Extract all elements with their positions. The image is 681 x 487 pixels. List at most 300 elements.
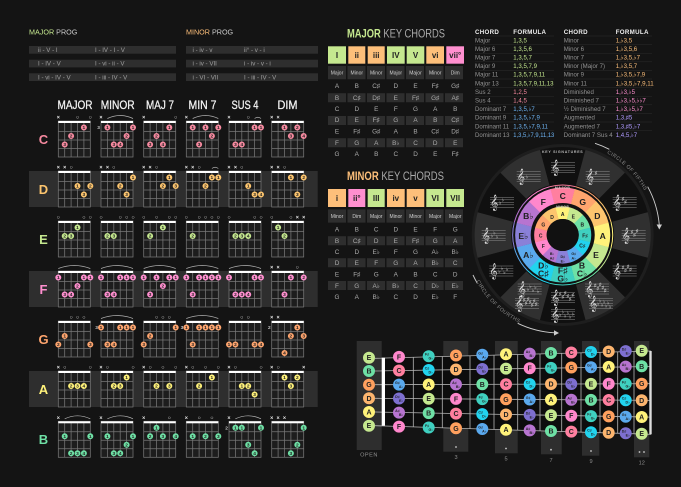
heading: minor prog: MINOR PROG bbox=[186, 28, 234, 36]
C sus 4: 1134 bbox=[234, 125, 263, 148]
A dim: 123 bbox=[283, 375, 299, 390]
chord formula table: major family: CHORD bbox=[475, 29, 499, 36]
accidental note labels: E♭ bbox=[482, 370, 487, 374]
minor progressions panel: i - iv - v bbox=[192, 47, 213, 54]
chord formula table: minor family: FORMULA bbox=[616, 29, 649, 36]
accidental note labels: D♭ bbox=[591, 433, 595, 437]
minor progressions panel bbox=[186, 28, 318, 81]
major key chords table: G bbox=[354, 140, 359, 147]
E min 7: 2 bbox=[191, 234, 194, 240]
accidental note labels: F♯ bbox=[587, 413, 591, 417]
C minor: 11234 bbox=[106, 125, 135, 148]
accidental note labels: C♯ bbox=[478, 411, 483, 415]
G maj 7: 123 bbox=[142, 325, 177, 348]
minor key chords table: A bbox=[355, 294, 360, 301]
accidental note labels: C♯ bbox=[526, 381, 530, 385]
F sus 4 bbox=[228, 266, 263, 307]
B minor: 11234 bbox=[106, 434, 135, 457]
A maj 7 bbox=[142, 365, 177, 407]
key signature staves: 𝄞 bbox=[589, 296, 597, 312]
minor key chords table: E♭ bbox=[452, 283, 459, 290]
E min 7 bbox=[185, 215, 220, 257]
minor key chords table: Minor bbox=[390, 214, 402, 220]
D minor bbox=[99, 165, 135, 207]
numeral cells: vii° bbox=[449, 51, 461, 60]
nut bbox=[382, 358, 385, 426]
row band: A bbox=[29, 371, 318, 407]
numeral cells: vi bbox=[432, 51, 439, 60]
A sus 4: 123 bbox=[240, 384, 256, 398]
C min 7: × bbox=[185, 115, 188, 121]
minor key chords table: C♯ bbox=[353, 238, 361, 245]
major key chords table: G♯ bbox=[451, 83, 459, 90]
major key chords table: D bbox=[335, 117, 340, 124]
B min 7: 123 bbox=[191, 434, 220, 440]
numeral cells: ii° bbox=[353, 194, 361, 203]
major key chords table: G bbox=[335, 151, 340, 158]
D sus 4 bbox=[227, 165, 263, 207]
B dim: 123 bbox=[290, 425, 305, 457]
C maj 7 bbox=[142, 115, 177, 157]
E maj 7: ○○○○ bbox=[142, 215, 177, 221]
chord formula table: minor family: Minor (Major 7) bbox=[564, 63, 605, 70]
minor key labels: D bbox=[550, 215, 554, 221]
D sus 4: 134 bbox=[247, 184, 263, 198]
accidental note labels: A♯ bbox=[622, 363, 626, 367]
major key chords table: E bbox=[453, 140, 457, 147]
E major bbox=[57, 215, 92, 257]
key signature staves: 𝄞 bbox=[551, 160, 559, 176]
accidental note labels: A♯ bbox=[452, 381, 457, 385]
B maj 7: ×○ bbox=[142, 415, 171, 421]
row: A chords: A bbox=[39, 382, 49, 397]
minor key chords table: B♭ bbox=[432, 260, 439, 267]
accidental note labels: G♯ bbox=[526, 396, 530, 400]
minor key chords table: A bbox=[413, 260, 418, 267]
accidental note labels: F♯ bbox=[425, 424, 429, 428]
B dim: ××× bbox=[270, 415, 286, 421]
chord formula table: major family: 1,3,5,♭7,9,11,13 bbox=[513, 132, 555, 139]
minor progressions panel: i - VI - VII bbox=[192, 74, 219, 81]
D min 7: 112 bbox=[204, 175, 220, 190]
chord formula table: major family: 1,3,5,♭7,9 bbox=[513, 115, 541, 122]
accidental note labels: E♭ bbox=[530, 415, 534, 419]
major key chords table bbox=[328, 28, 464, 158]
row: B chords: B bbox=[39, 432, 48, 447]
major key chords table: F♯ bbox=[452, 151, 459, 158]
minor key chords table: Major bbox=[429, 214, 442, 220]
arrow: circle of fifths bbox=[595, 143, 662, 230]
C min 7: 11123 bbox=[191, 125, 220, 148]
key signature staves: 𝄞 bbox=[622, 228, 630, 244]
arrow: circle of fourths bbox=[473, 275, 559, 336]
chord formula table: major family: Dominant 9 bbox=[475, 115, 507, 122]
major progressions panel: ii - V - I bbox=[38, 47, 58, 54]
major key chords table: D bbox=[393, 83, 398, 90]
major progressions panel: I - IV - V bbox=[38, 61, 62, 68]
major key labels: E♭ bbox=[518, 231, 528, 241]
accidental note labels: C♯ bbox=[587, 348, 592, 352]
major key labels: C bbox=[560, 191, 566, 201]
accidental note labels: E♭ bbox=[626, 352, 630, 356]
chord type headers bbox=[58, 100, 298, 112]
fretboard bbox=[357, 341, 652, 466]
G dim: 1234 bbox=[283, 325, 305, 357]
numeral cells: VII bbox=[450, 194, 460, 203]
fret labels: 5 bbox=[504, 456, 508, 462]
accidental note labels: B♭ bbox=[626, 367, 630, 371]
D dim bbox=[270, 165, 305, 207]
major key chords table: Minor bbox=[370, 70, 383, 76]
chord formula table: major family: 1,3,5 bbox=[513, 37, 527, 44]
minor key labels: D♯ bbox=[560, 255, 565, 259]
accidental note labels: G♯ bbox=[478, 351, 483, 355]
C major: ×○○ bbox=[57, 115, 92, 121]
key signature staves: ♭♭♭♭♭ bbox=[527, 284, 539, 295]
ring labels: MAJOR bbox=[555, 186, 571, 190]
minor key chords table: F bbox=[374, 260, 378, 267]
notes: D sharp / E flat bbox=[399, 351, 626, 433]
chord formula table: minor family: 1,3,♯5 bbox=[616, 115, 633, 122]
G sus 4: ○○ bbox=[240, 315, 250, 321]
accidental note labels: A♭ bbox=[626, 417, 630, 421]
A sus 4 bbox=[227, 365, 263, 407]
chord formula table: major family: FORMULA bbox=[513, 29, 547, 36]
minor key chords table: G bbox=[335, 294, 340, 301]
chord type headers: MINOR bbox=[101, 100, 135, 112]
accidental note labels: G♭ bbox=[428, 428, 433, 432]
numeral cells bbox=[328, 189, 464, 207]
minor key chords table: G bbox=[374, 272, 379, 278]
G min 7 bbox=[181, 316, 220, 357]
row: F chords: F bbox=[40, 282, 48, 297]
major key labels: B♭ bbox=[523, 211, 533, 221]
key signature staves: ♭♭♭♭♭♭ bbox=[559, 309, 574, 320]
E dim bbox=[270, 215, 305, 257]
A major: ×○○ bbox=[57, 365, 92, 371]
minor key chords table: C bbox=[453, 260, 458, 267]
notes: B: BBBBBBB bbox=[366, 350, 644, 436]
accidental note labels: G♭ bbox=[591, 417, 596, 421]
chord formula table: major family: 1,3,5,♭7,9,11 bbox=[513, 123, 549, 130]
chord formula table: major family: Major 6 bbox=[475, 46, 496, 53]
C dim: 1234 bbox=[283, 125, 305, 140]
D dim: ××○ bbox=[270, 165, 286, 171]
F major: 111234 bbox=[57, 275, 92, 298]
minor key labels: E bbox=[572, 214, 576, 220]
numeral cells: IV bbox=[392, 51, 400, 60]
major key chords table: D bbox=[433, 140, 438, 147]
minor key labels: F♯ bbox=[582, 234, 588, 240]
minor key chords table: F bbox=[394, 249, 398, 256]
C minor: 3 bbox=[97, 125, 100, 131]
key signature staves: 𝄞 bbox=[482, 228, 490, 244]
heading: minor key chords: MINOR KEY CHORDS bbox=[347, 171, 444, 183]
chord type headers: MAJ 7 bbox=[146, 100, 174, 112]
D dim: 123 bbox=[290, 175, 305, 198]
fret markers bbox=[455, 446, 645, 453]
row: G chords: G bbox=[38, 332, 49, 347]
chord formula table: major family: Dominant 7 bbox=[475, 106, 507, 113]
accidental note labels: E♭ bbox=[571, 384, 576, 388]
G min 7: 111113 bbox=[185, 325, 220, 348]
chord formula table: minor family: 1,3,♯5,♭7 bbox=[616, 123, 641, 130]
minor key chords table: A bbox=[453, 238, 458, 245]
B major bbox=[57, 415, 92, 457]
accidental note labels: C♯ bbox=[425, 366, 429, 370]
major key chords table: A♯ bbox=[451, 95, 459, 102]
chord formula table: major family: 1,2,5 bbox=[513, 89, 527, 96]
key signature staves: ♭♭♭♭ bbox=[498, 266, 508, 276]
F min 7 bbox=[185, 266, 220, 307]
minor key chords table: B bbox=[335, 238, 339, 245]
F maj 7: 111123 bbox=[142, 275, 177, 298]
C maj 7: ×○ bbox=[142, 115, 177, 121]
notes: C sharp / D flat bbox=[429, 352, 626, 432]
key signature staves: ♯♯♯ bbox=[631, 229, 639, 239]
row: B chords bbox=[39, 415, 305, 457]
accidental note labels: A♭ bbox=[399, 385, 403, 389]
end of neck bbox=[649, 351, 652, 434]
F major bbox=[57, 266, 92, 307]
notes: G: GGGGGGG bbox=[366, 353, 645, 433]
major key chords table: C♯ bbox=[353, 95, 361, 102]
chord formula table: major family: Major 7 bbox=[475, 54, 496, 62]
minor key chords table: E bbox=[355, 260, 359, 267]
minor key labels: A bbox=[561, 212, 565, 218]
A dim bbox=[270, 365, 305, 407]
row: D chords bbox=[39, 165, 305, 207]
fret labels: 12 bbox=[639, 460, 645, 466]
key signature staves: ♯♯♯♯♯♯ bbox=[559, 291, 574, 303]
key signature staves: 𝄞 bbox=[490, 195, 498, 211]
major key chords table: F bbox=[394, 106, 398, 113]
accidental note labels: D♭ bbox=[591, 352, 595, 356]
accidental note labels: G♭ bbox=[428, 357, 433, 361]
chord formula table: minor family: ½ Diminished 7 bbox=[564, 106, 606, 113]
major key chords table: E bbox=[335, 128, 339, 136]
chord formula table: minor family: 1,♭3,5,♭7,9,11 bbox=[616, 80, 654, 87]
chord formula table: major family: 1,3,5,7,9,11 bbox=[513, 72, 546, 79]
major key labels bbox=[518, 191, 606, 284]
accidental note labels: D♭ bbox=[626, 401, 630, 405]
accidental note labels: F♯ bbox=[547, 364, 551, 368]
accidental note labels: A♭ bbox=[530, 400, 534, 404]
chord formula table: major family bbox=[475, 29, 555, 139]
D major bbox=[57, 165, 92, 207]
accidental note labels: D♯ bbox=[567, 380, 572, 384]
major progressions panel: I - vi - ii - V bbox=[95, 61, 125, 68]
accidental note labels: F♯ bbox=[479, 396, 483, 400]
B major: 11234 bbox=[63, 434, 92, 457]
G dim bbox=[268, 315, 305, 357]
chord formula table: minor family: 1,♭3,♭5,♭♭7 bbox=[616, 98, 646, 104]
E major: 123 bbox=[63, 225, 79, 240]
chord formula table: minor family: 1,♭3,♭5 bbox=[616, 89, 636, 96]
accidental note labels: D♭ bbox=[482, 415, 487, 419]
D sus 4: ××○ bbox=[227, 165, 243, 171]
chord formula table: minor family: Diminished bbox=[564, 89, 594, 96]
E dim: ○○×× bbox=[270, 215, 305, 221]
major key chords table: B bbox=[413, 128, 418, 136]
G minor: 3 bbox=[95, 325, 98, 331]
C dim bbox=[270, 115, 305, 157]
numeral cells: III bbox=[373, 194, 380, 203]
G dim: 2 bbox=[268, 325, 271, 331]
notes: D: DDDDDDD bbox=[366, 349, 644, 437]
minor key chords table: D bbox=[335, 260, 340, 267]
C minor bbox=[97, 115, 135, 157]
F min 7: 111113 bbox=[185, 275, 220, 298]
major key labels: G bbox=[579, 197, 586, 207]
minor key chords table: Major bbox=[449, 214, 462, 220]
minor key chords table: Dim bbox=[352, 214, 361, 220]
A maj 7: ×○○○ bbox=[142, 365, 177, 371]
key signature staves: 𝄞 bbox=[517, 169, 525, 185]
minor key labels: B♭ bbox=[550, 252, 554, 256]
major progressions panel: I - vi - IV - V bbox=[38, 74, 72, 81]
key signature staves bbox=[482, 160, 646, 323]
major key chords table: Dim bbox=[451, 70, 460, 76]
major key chords table: B bbox=[374, 151, 378, 158]
major key chords table: A bbox=[355, 151, 360, 158]
numeral cells: iv bbox=[392, 194, 400, 203]
major key chords table: E bbox=[355, 117, 359, 124]
chord formula table: minor family: 1,♭3,5 bbox=[616, 37, 633, 44]
minor key chords table: E bbox=[413, 226, 418, 234]
G minor: 111134 bbox=[100, 325, 135, 348]
accidental note labels: G♭ bbox=[551, 368, 556, 372]
chord formula table: major family: Major 9 bbox=[475, 63, 496, 70]
major key chords table: F♯ bbox=[432, 83, 439, 90]
minor key chords table: Major bbox=[370, 214, 383, 220]
numeral cells bbox=[328, 46, 464, 64]
minor key labels: E♭ bbox=[561, 260, 565, 264]
F sus 4: 111234 bbox=[228, 275, 263, 298]
minor key chords table: G bbox=[393, 260, 398, 267]
minor key chords table: Minor bbox=[331, 214, 344, 220]
minor key chords table: C bbox=[413, 283, 418, 290]
notes: A: AAAAAAA bbox=[366, 352, 644, 434]
row band: F bbox=[29, 271, 318, 307]
fret labels: 9 bbox=[589, 459, 593, 465]
accidental note labels: D♯ bbox=[622, 430, 626, 434]
minor key chords table: B♭ bbox=[452, 249, 459, 256]
key signature staves: ♯♯ bbox=[622, 196, 627, 205]
numeral cells: ii bbox=[355, 51, 359, 60]
B sus 4: 2 bbox=[225, 425, 228, 431]
chord formula table: minor family: 1,♭3,5,♭7 bbox=[616, 54, 641, 62]
fret labels: 7 bbox=[549, 458, 553, 464]
fret labels bbox=[360, 452, 645, 466]
major key labels: C♭ bbox=[577, 268, 587, 278]
G major bbox=[57, 315, 92, 357]
F dim: 123 bbox=[283, 275, 305, 298]
major key chords table: D♯ bbox=[372, 95, 380, 102]
chord formula table: minor family bbox=[564, 29, 654, 139]
chord formula table: minor family: Minor 7 bbox=[564, 54, 585, 62]
A min 7: 12 bbox=[198, 375, 214, 390]
E sus 4 bbox=[227, 215, 263, 257]
G sus 4: 1234 bbox=[228, 342, 263, 348]
accidental note labels: A♯ bbox=[567, 396, 572, 400]
key signature staves: ♭♭♭♭♭♭♭ bbox=[597, 298, 611, 310]
major key chords table: Minor bbox=[351, 70, 363, 76]
major key chords table: C bbox=[413, 140, 418, 147]
B sus 4 bbox=[225, 415, 263, 457]
major key chords table: Minor bbox=[429, 70, 442, 76]
circle of fifths: MINOR bbox=[556, 205, 569, 209]
key signature staves: ♯♯♯♯♯ bbox=[594, 282, 607, 294]
key signatures label: KEY SIGNATURES bbox=[542, 150, 583, 154]
row: C chords: C bbox=[39, 132, 49, 147]
chord type headers: SUS 4 bbox=[232, 100, 259, 112]
key signature staves: 𝄞 bbox=[551, 307, 559, 323]
accidental note labels: B♭ bbox=[399, 413, 403, 417]
C sus 4: ×○ bbox=[227, 115, 250, 121]
chord formula table: major family: 1,3,5,7,9 bbox=[513, 63, 538, 70]
accidental note labels: G♭ bbox=[625, 384, 630, 388]
A maj 7: 23 bbox=[155, 384, 171, 390]
A major: 234 bbox=[70, 384, 86, 390]
A min 7 bbox=[185, 365, 220, 407]
major key chords table: D♯ bbox=[451, 128, 459, 136]
major key chords table: G♯ bbox=[372, 128, 380, 136]
major key chords table: C bbox=[393, 151, 398, 158]
E maj 7 bbox=[142, 215, 177, 257]
D minor: ××○ bbox=[99, 165, 115, 171]
accidental note labels: D♯ bbox=[622, 348, 626, 352]
chord formula table: major family: Major bbox=[475, 37, 490, 44]
minor key chords table: E bbox=[335, 272, 339, 278]
B dim bbox=[270, 415, 305, 457]
major key chords table: C♯ bbox=[431, 128, 439, 136]
minor key chords table: F bbox=[335, 283, 339, 290]
major key chords table: F♯ bbox=[412, 95, 419, 102]
chord formula table: minor family: 1,♭3,5,6 bbox=[616, 46, 638, 53]
major key labels: G♭ bbox=[557, 274, 568, 284]
circle of fifths bbox=[472, 142, 662, 336]
fret labels: OPEN bbox=[360, 452, 378, 458]
row: A chords bbox=[39, 365, 305, 407]
B maj 7 bbox=[142, 415, 177, 457]
accidental note labels: F♯ bbox=[622, 380, 626, 384]
major key chords table: C bbox=[335, 106, 340, 113]
minor key chords table: D bbox=[374, 238, 379, 245]
major key labels: A bbox=[600, 231, 606, 241]
minor key chords table: F♯ bbox=[353, 272, 360, 278]
major key chords table: Major bbox=[390, 70, 402, 76]
chord formula table: major family: 1,3,5,♭7 bbox=[513, 106, 535, 113]
B maj 7: 1234 bbox=[149, 425, 177, 440]
major key chords table: B bbox=[335, 95, 339, 102]
C major: 123 bbox=[63, 125, 86, 148]
chord formula table: minor family: Minor 11 bbox=[564, 80, 588, 87]
F minor: 111134 bbox=[100, 275, 135, 298]
major key chords table: A bbox=[374, 140, 379, 147]
chord formula table: major family: Major 13 bbox=[475, 80, 499, 87]
D maj 7: 123 bbox=[162, 175, 177, 190]
B sus 4: × bbox=[227, 415, 231, 421]
minor key chords table: E bbox=[394, 238, 398, 245]
D maj 7 bbox=[142, 165, 177, 207]
fret labels: 3 bbox=[454, 455, 458, 461]
notes: C: CCCCCC bbox=[396, 350, 611, 436]
label: circle of fourths: CIRCLE OF FOURTHS bbox=[477, 280, 520, 322]
major key chords table: D bbox=[354, 106, 359, 113]
B minor: × bbox=[99, 415, 103, 421]
accidental note labels: D♯ bbox=[395, 395, 400, 399]
